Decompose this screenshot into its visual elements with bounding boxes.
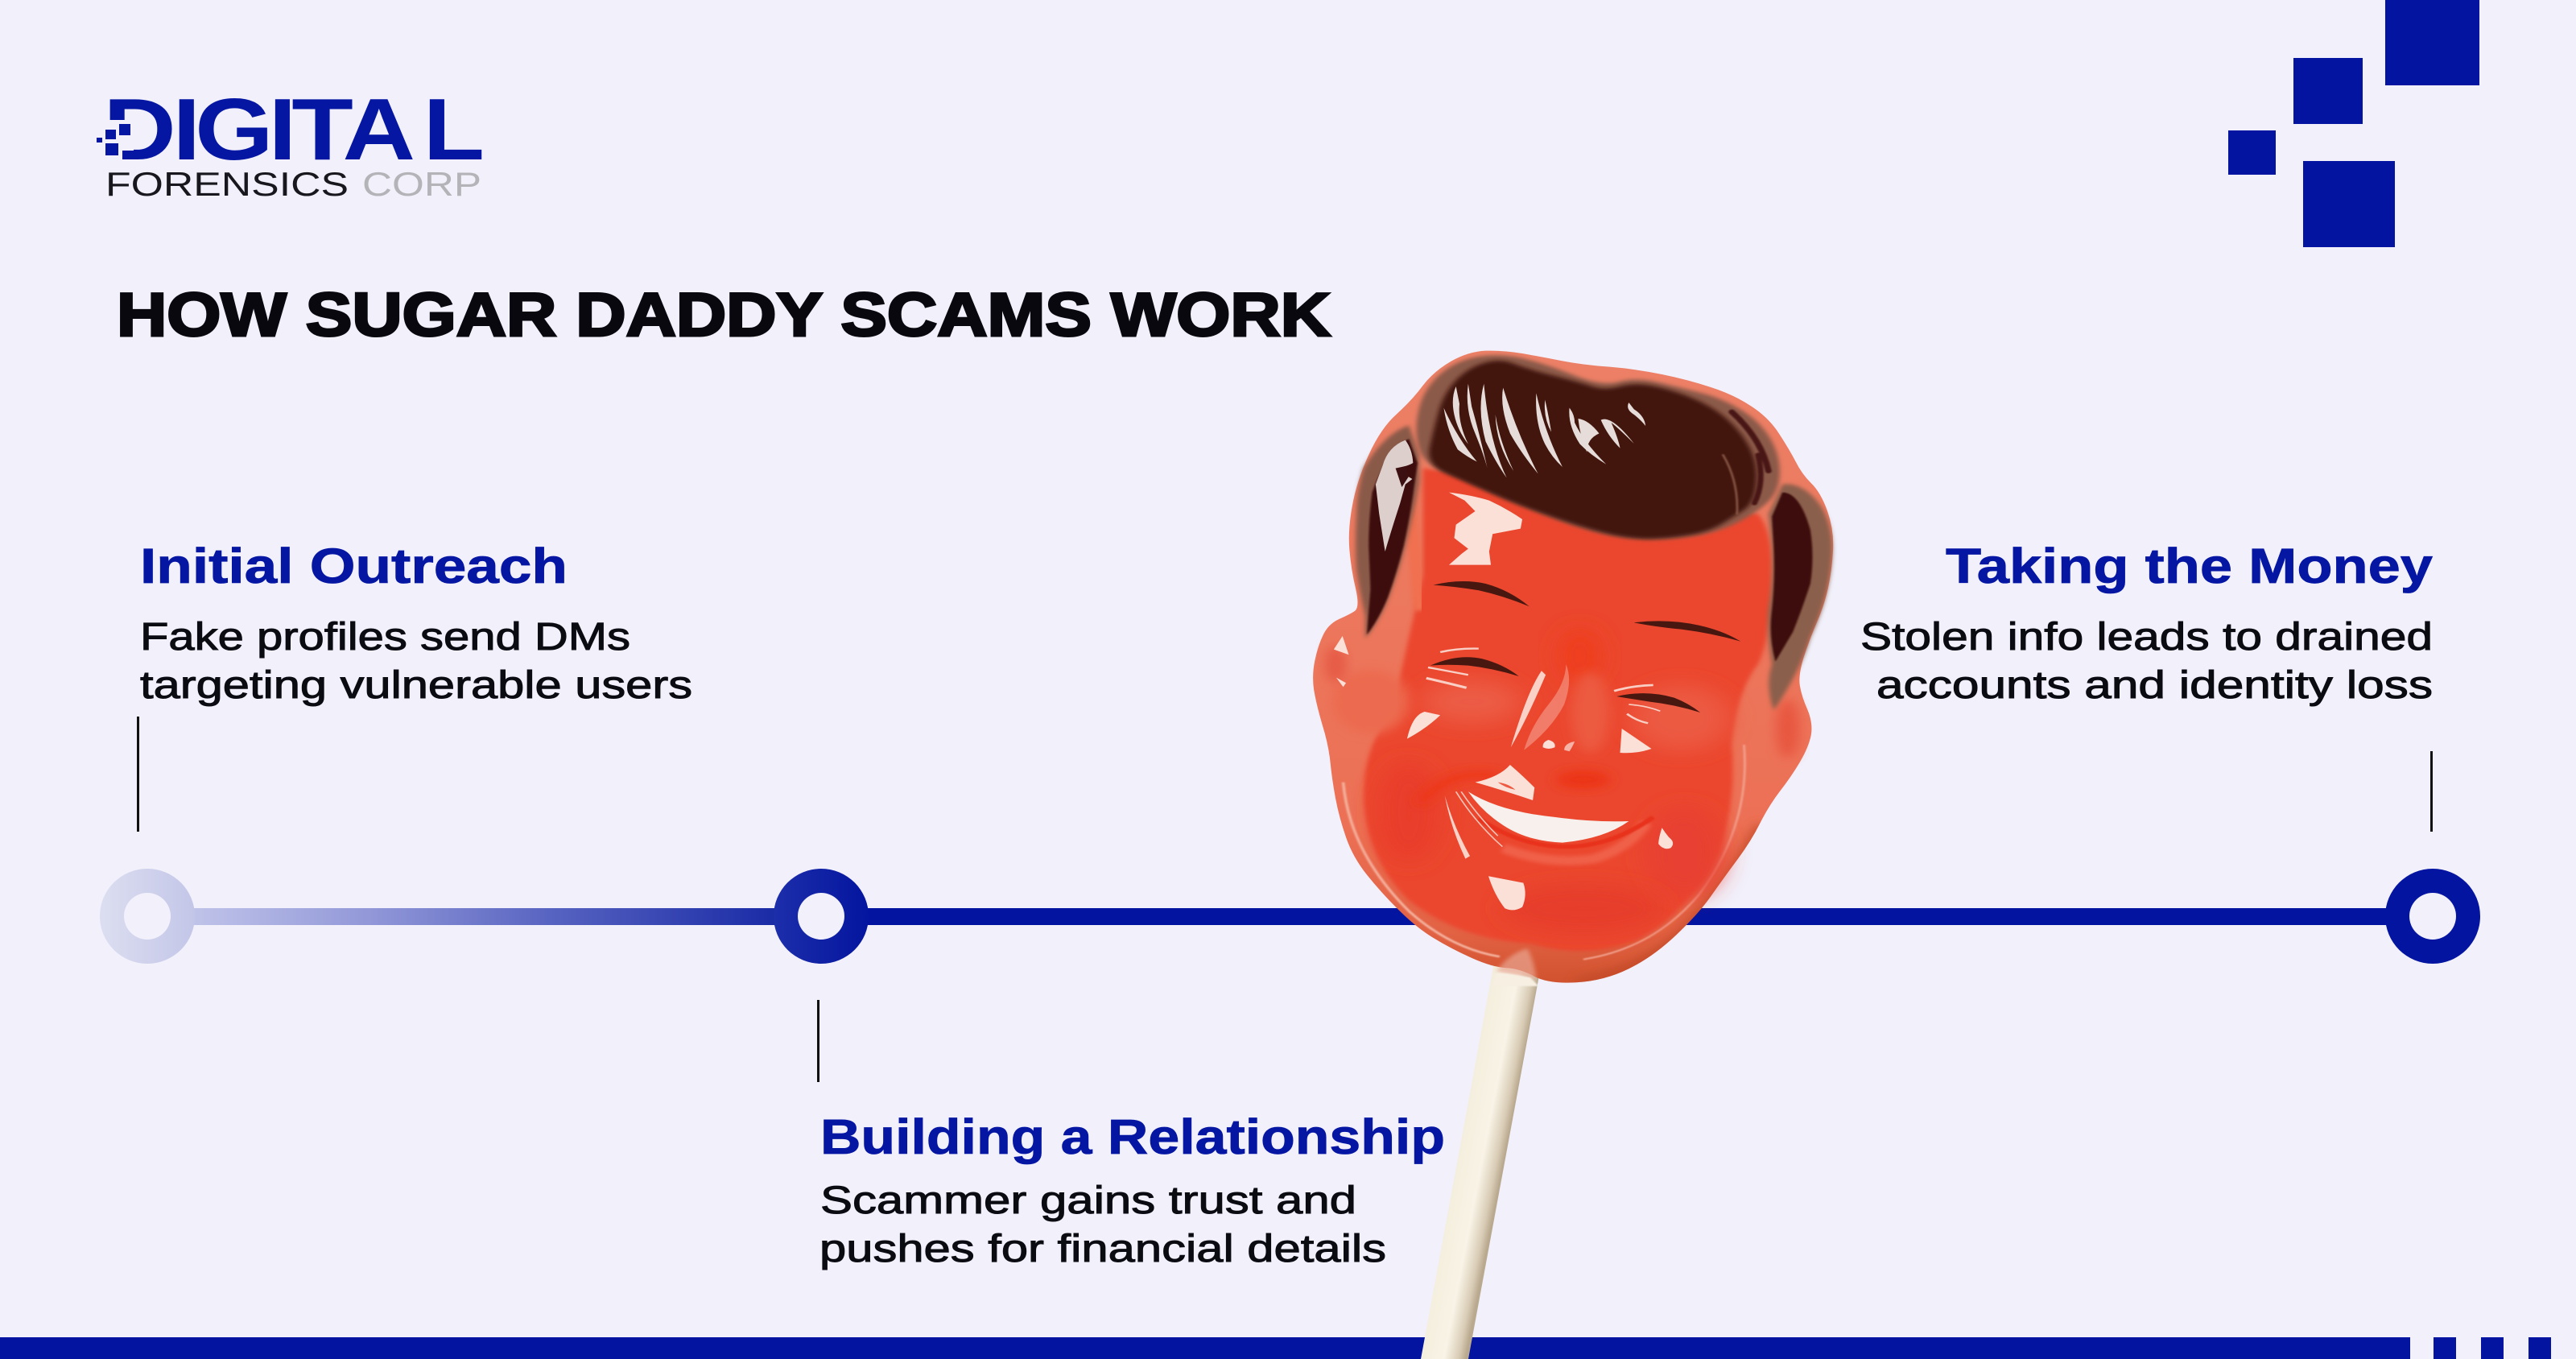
top hair rim [1416, 355, 1780, 539]
step 1: Initial Outreach: Initial Outreach [140, 539, 568, 593]
step 2: Building a Relationship: Scammer gains trust and [820, 1179, 1356, 1222]
forehead highlight [1449, 493, 1522, 565]
hair highlights [1443, 384, 1645, 477]
decorative squares: top right [2228, 0, 2479, 247]
timeline node 1 [100, 869, 195, 964]
step 1: Initial Outreach: Fake profiles send DMs [140, 616, 630, 659]
title: HOW SUGAR DADDY SCAMS WORK [117, 281, 1331, 349]
connector: step 1 [137, 717, 139, 832]
lollipop illustration [1313, 351, 1833, 1359]
step 2: Building a Relationship: pushes for financial details [819, 1228, 1386, 1270]
lollipop stick [1421, 958, 1542, 1359]
step 3: Taking the Money: Taking the Money [1946, 539, 2433, 593]
hair stripes [1723, 412, 1769, 514]
step 2: Building a Relationship: Building a Relationship [820, 1109, 1445, 1164]
timeline node 3 [2385, 869, 2480, 964]
step 3: Taking the Money [1860, 539, 2433, 707]
eyes [1426, 649, 1700, 723]
step 2: Building a Relationship [819, 1109, 1445, 1270]
logo: Digital Forensics Corp: FORENSICS [105, 165, 349, 203]
right side hair [1768, 484, 1832, 710]
connector: step 3 [2430, 751, 2433, 832]
timeline node 2 [774, 869, 869, 964]
mouth [1445, 765, 1653, 861]
stick socket [1496, 948, 1536, 980]
timeline [100, 869, 2480, 964]
step 1: Initial Outreach: targeting vulnerable users [140, 664, 692, 707]
step 3: Taking the Money: Stolen info leads to drained [1860, 616, 2433, 659]
lollipop head [1313, 351, 1833, 986]
rim shading [1344, 745, 1761, 982]
left side hair [1356, 425, 1419, 638]
step 1: Initial Outreach [140, 539, 692, 707]
bottom bar with stripes [0, 1337, 2551, 1359]
face [1364, 469, 1772, 951]
logo: Digital Forensics Corp: CORP [362, 165, 481, 203]
top hair [1429, 361, 1757, 539]
eyebrows [1433, 581, 1740, 642]
cheek and chin highlights [1334, 636, 1673, 910]
face shading [1325, 477, 1799, 932]
connector: step 2 [817, 1000, 819, 1082]
logo: Digital Forensics Corp: DIGITAL [103, 81, 485, 178]
nose [1511, 664, 1575, 751]
step 3: Taking the Money: accounts and identity loss [1876, 664, 2433, 707]
